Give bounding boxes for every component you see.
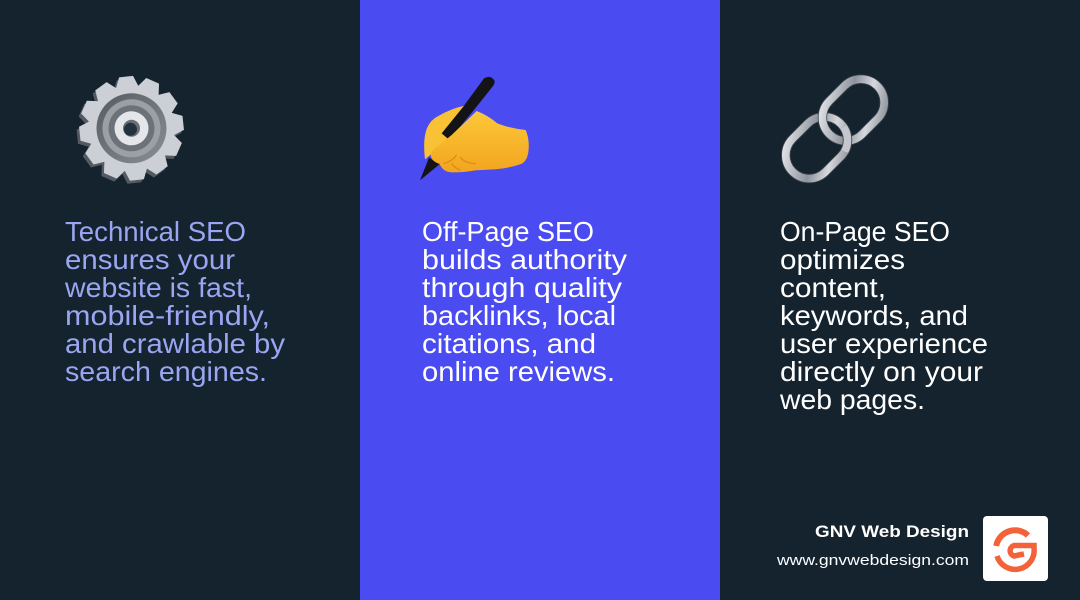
- icon: GNV logo: [983, 516, 1048, 581]
- text block: off-page SEO: Off-Page SEO: [422, 216, 594, 247]
- panel: off-page SEO background: [360, 0, 720, 600]
- text block: off-page SEO: builds authority: [422, 244, 627, 275]
- icon: gear: [72, 71, 189, 188]
- text block: technical SEO: ensures your: [65, 244, 235, 275]
- text block: on-page SEO: directly on your: [780, 356, 983, 387]
- icon: chain links: [781, 74, 889, 184]
- text block: on-page SEO: On-Page SEO: [780, 216, 950, 247]
- text block: on-page SEO: keywords, and: [780, 300, 968, 331]
- text block: technical SEO: search engines.: [65, 356, 267, 387]
- text block: off-page SEO: [422, 216, 627, 387]
- text block: technical SEO: and crawlable by: [65, 328, 285, 359]
- panel: on-page SEO background: [720, 0, 1080, 600]
- text block: technical SEO: website is fast,: [64, 272, 252, 303]
- text block: off-page SEO: citations, and: [422, 328, 596, 359]
- text block: on-page SEO: optimizes: [780, 244, 905, 275]
- text block: on-page SEO: user experience: [780, 328, 988, 359]
- text block: off-page SEO: through quality: [422, 272, 622, 303]
- text block: technical SEO: mobile-friendly,: [65, 300, 270, 331]
- icon: writing hand: [420, 77, 529, 180]
- website url: www.gnvwebdesign.com: [776, 552, 969, 569]
- panel: technical SEO background: [0, 0, 360, 600]
- text block: technical SEO: Technical SEO: [65, 216, 246, 247]
- text block: on-page SEO: web pages.: [779, 384, 925, 415]
- text block: technical SEO: [64, 216, 285, 387]
- text block: on-page SEO: [779, 216, 988, 415]
- text block: off-page SEO: online reviews.: [422, 356, 615, 387]
- brand name: GNV Web Design: [815, 522, 969, 541]
- text block: on-page SEO: content,: [780, 272, 886, 303]
- text block: off-page SEO: backlinks, local: [422, 300, 616, 331]
